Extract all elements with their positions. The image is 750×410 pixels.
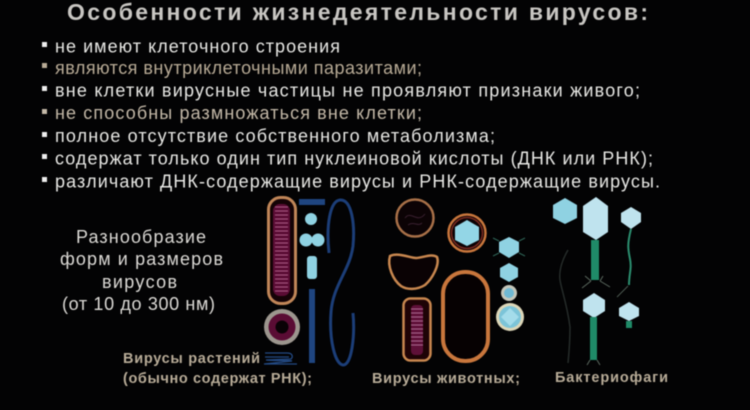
icon: long filamentous virus (328, 200, 354, 365)
icon: small ringed capsid (501, 285, 517, 301)
icon: large ringed capsid (496, 303, 524, 331)
icon: long blue rod (309, 289, 315, 363)
icon: round enveloped virus (396, 200, 434, 236)
label: plant viruses: Вирусы растений (123, 351, 260, 367)
animal viruses group (389, 200, 525, 361)
icon: long-tailed phage (617, 207, 641, 297)
bacteriophages group (553, 197, 641, 365)
text: diversity of forms and sizes (60, 227, 223, 314)
bullet 7: различают ДНК-содержащие вирусы и РНК-содержащие вирусы. (55, 172, 660, 192)
icon: free capsid (553, 198, 577, 224)
bullet 2: являются внутриклеточными паразитами; (55, 58, 422, 78)
text: diversity of forms and sizes: Разнообразие (76, 227, 206, 247)
icon: striped rod virus (404, 298, 430, 360)
bullet 6: содержат только один тип нуклеиновой кислоты (ДНК или РНК); (55, 148, 653, 168)
icon: capsid with rings (448, 214, 486, 252)
icon: cyan rod (307, 256, 317, 279)
icon: rod virus with orange capsule (268, 198, 296, 304)
icon: short-tailed phage (619, 302, 639, 328)
plant viruses group (264, 198, 354, 365)
bullet 4: не способны размножаться вне клетки; (55, 103, 422, 123)
bullet 1: не имеют клеточного строения (55, 36, 340, 56)
icon: large phage (582, 197, 610, 288)
icon: capsid (500, 263, 518, 282)
label: plant viruses: (обычно содержат РНК); (123, 371, 312, 387)
icon: phage with long tail (583, 293, 605, 365)
icon: kidney-shaped virus (389, 255, 438, 289)
icon: cyan double capsid (300, 234, 324, 246)
icon: thin filament phage (560, 250, 570, 363)
label: animal viruses: Вирусы животных; (372, 371, 520, 387)
bullet list (42, 36, 660, 192)
icon: round virus (264, 309, 300, 345)
icon: blue bar (299, 199, 325, 205)
label: plant viruses (123, 351, 312, 387)
label: bacteriophages: Бактериофаги (555, 370, 668, 386)
icon: large oval virus (443, 272, 488, 361)
bullet 3: вне клетки вирусные частицы не проявляют признаки живого; (55, 80, 640, 100)
icon: cyan small capsid (305, 213, 317, 225)
text: diversity of forms and sizes: форм и размеров (60, 249, 223, 269)
icon: small coiled filament (264, 353, 297, 364)
bullet 5: полное отсутствие собственного метаболизма; (55, 126, 495, 146)
text: diversity of forms and sizes: (от 10 до 300 нм) (62, 294, 215, 314)
icon: spiked capsid (493, 237, 525, 258)
text: diversity of forms and sizes: вирусов (102, 272, 177, 292)
